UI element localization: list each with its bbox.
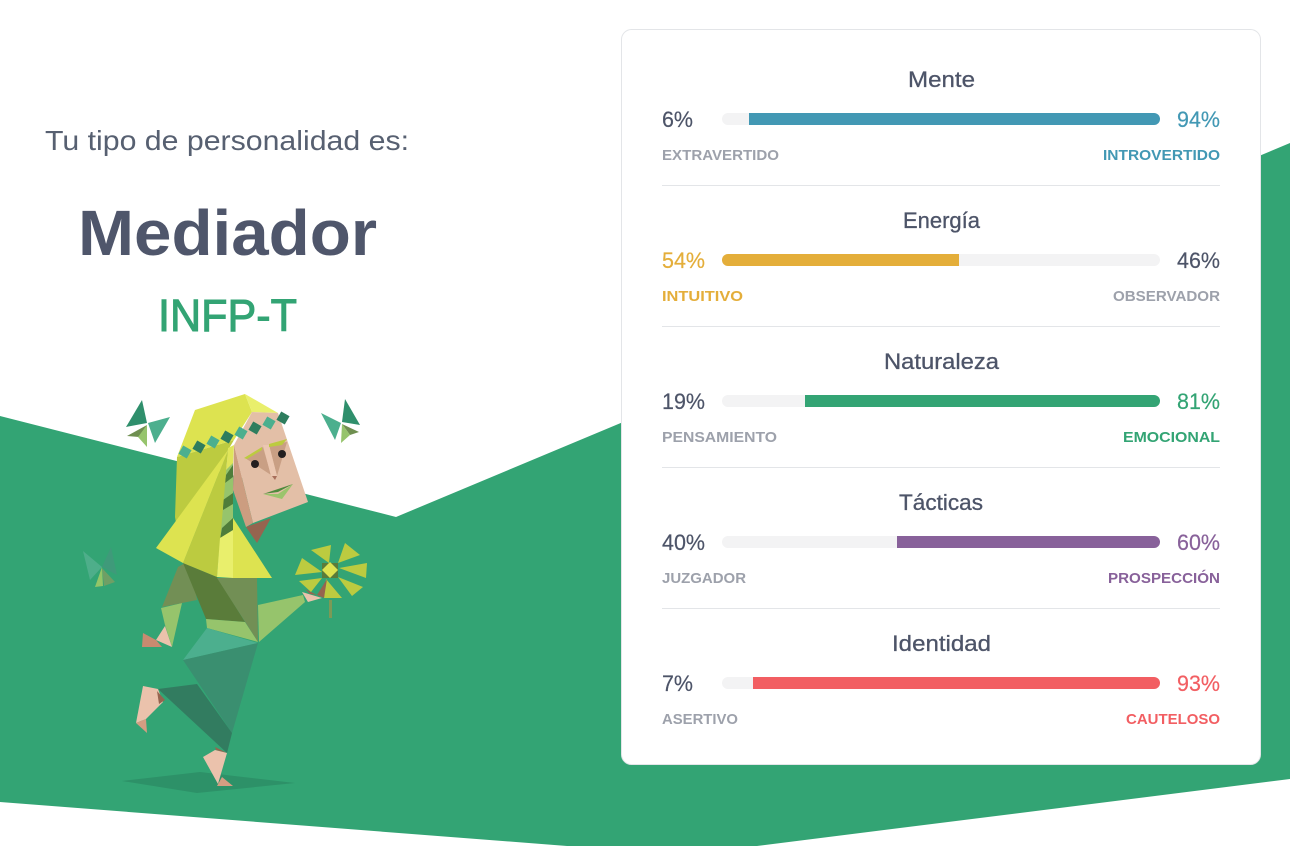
trait row: Mente: EXTRAVERTIDO bbox=[662, 147, 779, 164]
torso bbox=[183, 563, 258, 642]
panel: personality traits card bbox=[622, 30, 1260, 764]
card background bbox=[622, 30, 1260, 764]
trait row: Mente: INTROVERTIDO bbox=[1103, 147, 1220, 164]
heading: personality name: Mediador bbox=[78, 197, 377, 269]
front arm and hand bbox=[258, 589, 322, 642]
trait row: Tácticas: JUZGADOR bbox=[662, 570, 746, 587]
skirt bbox=[158, 628, 258, 753]
trait row: Naturaleza: 19% bbox=[662, 389, 705, 414]
illustration: mediator character bbox=[83, 394, 367, 793]
back arm bbox=[142, 560, 197, 647]
trait row: Naturaleza: PENSAMIENTO bbox=[662, 429, 777, 446]
personality code: INFP-T bbox=[158, 290, 297, 341]
trait row: Mente bbox=[662, 67, 1220, 186]
trait row: Naturaleza: Naturaleza bbox=[884, 349, 1000, 374]
trait row: Energía: 54% bbox=[662, 248, 705, 273]
trait row: Naturaleza bbox=[662, 349, 1220, 468]
butterfly right bbox=[321, 399, 360, 443]
trait row: Naturaleza: 81% bbox=[1177, 389, 1220, 414]
flower bbox=[295, 543, 367, 618]
butterfly left bbox=[126, 400, 170, 447]
trait row: Mente: 6% bbox=[662, 107, 693, 132]
trait row: Tácticas bbox=[662, 490, 1220, 609]
hair back bbox=[175, 394, 278, 563]
trait row: Identidad: 93% bbox=[1177, 671, 1220, 696]
trait row: Identidad bbox=[662, 631, 1220, 728]
brow bbox=[244, 447, 262, 459]
trait row: Energía: OBSERVADOR bbox=[1113, 288, 1220, 305]
butterfly faded bbox=[83, 547, 117, 587]
trait row: Mente: 94% bbox=[1177, 107, 1220, 132]
trait row: Mente: Mente bbox=[908, 67, 975, 92]
intro text: Tu tipo de personalidad es: bbox=[45, 125, 409, 156]
shadow bbox=[122, 772, 295, 793]
trait row: Identidad: ASERTIVO bbox=[662, 711, 738, 728]
trait row: Tácticas: 60% bbox=[1177, 530, 1220, 555]
trait row: Identidad: 7% bbox=[662, 671, 693, 696]
trait row: Energía bbox=[662, 208, 1220, 327]
trait row: Naturaleza: EMOCIONAL bbox=[1123, 429, 1220, 446]
neck bbox=[246, 518, 271, 543]
nose bbox=[263, 445, 277, 476]
trait row: Identidad: Identidad bbox=[892, 631, 991, 656]
trait row: Energía: Energía bbox=[903, 208, 981, 233]
back foot bbox=[136, 686, 165, 733]
trait row: Tácticas: PROSPECCIÓN bbox=[1108, 569, 1220, 587]
brow shadow bbox=[245, 447, 271, 475]
trait row: Identidad: CAUTELOSO bbox=[1126, 711, 1220, 728]
flower crown bbox=[178, 411, 290, 459]
trait row: Tácticas: Tácticas bbox=[899, 490, 983, 515]
face bbox=[233, 412, 308, 527]
mouth bbox=[263, 484, 293, 499]
front foot bbox=[203, 747, 233, 786]
eyes bbox=[251, 460, 259, 468]
hair strands and braid bbox=[156, 445, 272, 578]
trait row: Energía: INTUITIVO bbox=[662, 288, 743, 305]
trait row: Energía: 46% bbox=[1177, 248, 1220, 273]
trait row: Tácticas: 40% bbox=[662, 530, 705, 555]
